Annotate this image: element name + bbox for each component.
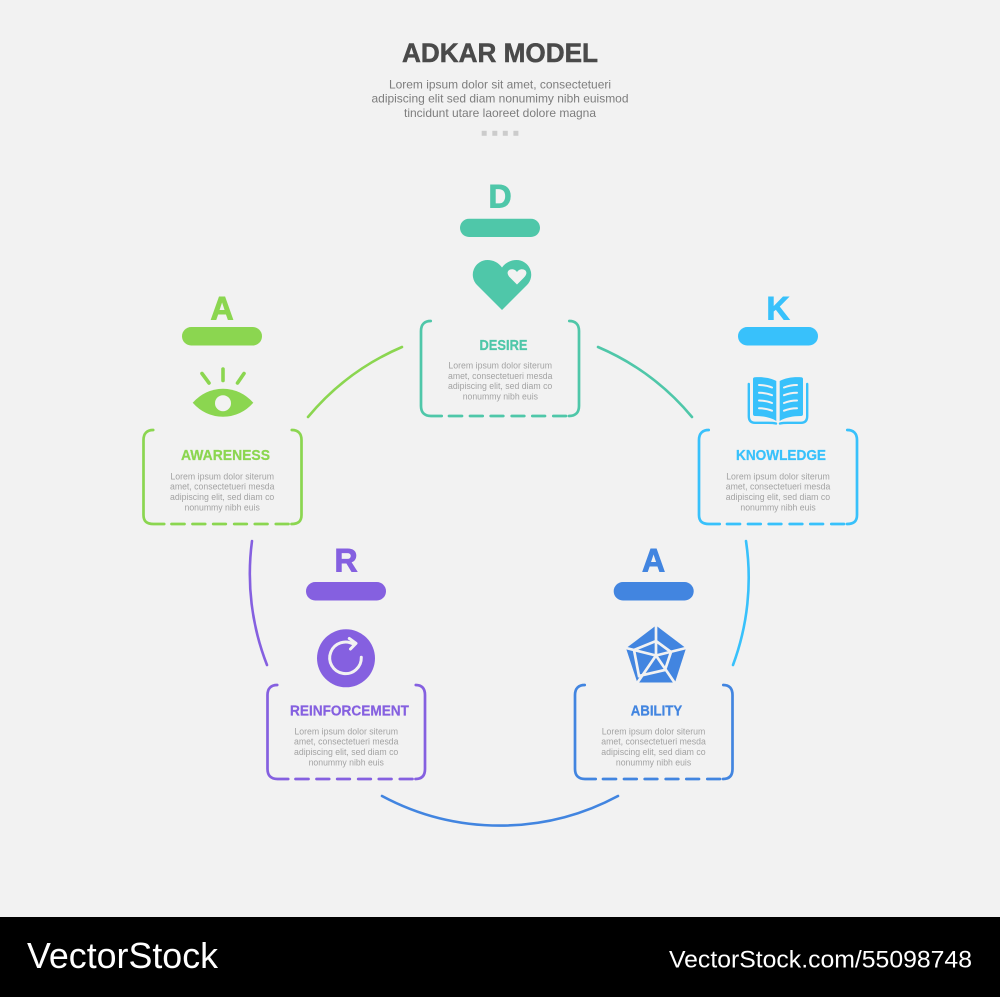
panel: reinforcement (268, 543, 425, 779)
box outline (575, 685, 732, 779)
letter A: A (642, 543, 665, 579)
panel: desire (421, 178, 579, 416)
box outline (699, 430, 857, 524)
arc: reinforcement to awareness (250, 541, 267, 665)
icon: eye (193, 369, 253, 417)
heading: DESIRE (480, 338, 528, 354)
heading: REINFORCEMENT (290, 704, 409, 720)
heading: ABILITY (631, 704, 682, 720)
box outline (268, 685, 425, 779)
panel: knowledge (699, 290, 857, 524)
arc: awareness to desire (308, 347, 402, 417)
bar (182, 327, 262, 346)
description: Lorem ipsum dolor siterum (726, 471, 830, 481)
heading: KNOWLEDGE (736, 448, 826, 464)
letter A: A (210, 290, 234, 326)
description (601, 726, 706, 767)
description (170, 471, 275, 512)
title: ADKAR MODEL (402, 38, 598, 68)
subtitle text block (372, 78, 628, 120)
subtitle text block: Lorem ipsum dolor sit amet, consectetueri (389, 78, 611, 92)
description: amet, consectetueri mesda (601, 737, 706, 747)
icon: refresh circle (317, 629, 375, 687)
letter D: D (488, 178, 512, 214)
title dots (482, 131, 518, 136)
description: adipiscing elit, sed diam co (294, 747, 398, 757)
bar (738, 327, 818, 346)
description: adipiscing elit, sed diam co (601, 747, 706, 757)
footer watermark band (0, 917, 1000, 997)
bar (614, 582, 694, 600)
description: nonummy nibh euis (616, 757, 692, 767)
subtitle text block: adipiscing elit sed diam nonumimy nibh euismod (372, 92, 628, 106)
brand name: VectorStock (27, 935, 219, 976)
panel: awareness (144, 290, 302, 524)
description: Lorem ipsum dolor siterum (602, 726, 705, 736)
icon: open book (749, 377, 807, 424)
description: adipiscing elit, sed diam co (448, 381, 552, 391)
description: Lorem ipsum dolor siterum (448, 360, 552, 370)
arc: desire to knowledge (598, 347, 692, 417)
box outline (421, 321, 579, 416)
box outline (144, 430, 302, 524)
description: Lorem ipsum dolor siterum (170, 471, 274, 481)
arc: knowledge to ability (733, 541, 749, 665)
description: amet, consectetueri mesda (294, 737, 399, 747)
icon: heart (473, 260, 531, 310)
description: nonummy nibh euis (184, 502, 260, 512)
bar (460, 219, 540, 237)
description: adipiscing elit, sed diam co (726, 492, 830, 502)
bar (306, 582, 386, 600)
heading: AWARENESS (181, 448, 270, 464)
description: nonummy nibh euis (463, 392, 539, 402)
description: nonummy nibh euis (740, 502, 816, 512)
image URL: VectorStock.com/55098748 (669, 946, 972, 974)
letter K: K (766, 290, 790, 326)
description (448, 360, 553, 402)
letter R: R (334, 543, 358, 579)
subtitle text block: tincidunt utare laoreet dolore magna (404, 106, 596, 120)
description (294, 726, 399, 767)
panel: ability (575, 543, 732, 779)
description: amet, consectetueri mesda (448, 371, 553, 381)
description: adipiscing elit, sed diam co (170, 492, 274, 502)
description: amet, consectetueri mesda (726, 482, 830, 492)
icon: radar pentagon (624, 623, 688, 684)
description: Lorem ipsum dolor siterum (294, 726, 398, 736)
description: amet, consectetueri mesda (170, 482, 275, 492)
arc: ability to reinforcement (382, 796, 618, 826)
description (726, 471, 830, 512)
description: nonummy nibh euis (309, 757, 384, 767)
